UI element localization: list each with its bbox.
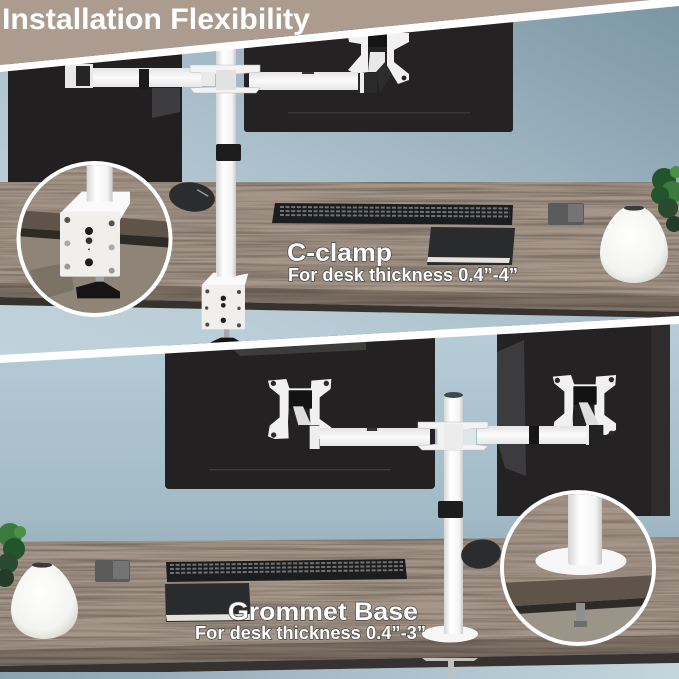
vase xyxy=(11,562,78,639)
mouse xyxy=(167,179,217,215)
under-desk plate and bolt xyxy=(422,658,478,676)
monitor right xyxy=(244,10,513,132)
left arm xyxy=(320,428,430,446)
clamp xyxy=(202,257,248,343)
monitor back right xyxy=(497,316,670,516)
title banner xyxy=(0,0,679,72)
right VESA bracket xyxy=(348,33,409,93)
label: Grommet Base xyxy=(195,598,426,643)
monitor left xyxy=(8,50,182,187)
desk thickness note: For desk thickness 0.4”-4” xyxy=(288,265,518,285)
title: Installation Flexibility xyxy=(2,3,310,36)
notebook xyxy=(427,227,515,265)
vase xyxy=(600,205,668,283)
right VESA bracket xyxy=(553,375,616,446)
label: C-clamp xyxy=(287,239,518,285)
right arm xyxy=(249,72,360,90)
desk xyxy=(0,537,679,667)
mount: grommet pole and arms xyxy=(268,375,616,676)
clip xyxy=(438,501,463,518)
plant xyxy=(0,523,26,587)
pole xyxy=(444,393,463,629)
notebook xyxy=(165,583,251,622)
left bracket xyxy=(65,64,93,88)
phone xyxy=(548,203,584,225)
mouse xyxy=(459,537,503,571)
divider strip xyxy=(0,316,679,363)
keyboard xyxy=(166,559,407,582)
desk underside xyxy=(0,653,679,672)
label: Grommet Base: Grommet Base xyxy=(228,598,418,626)
plant xyxy=(651,166,679,232)
hub xyxy=(190,65,260,93)
desk surface xyxy=(0,182,679,317)
clip xyxy=(216,144,241,161)
inset: C-clamp detail xyxy=(16,157,176,320)
desk thickness note: For desk thickness 0.4”-3” xyxy=(195,623,426,643)
panel: grommet scene xyxy=(0,316,679,679)
phone xyxy=(95,560,130,582)
mount: C-clamp pole and arms xyxy=(65,33,409,343)
monitor back left xyxy=(165,320,435,489)
desk underside xyxy=(0,297,679,318)
pole xyxy=(216,40,236,280)
panel: C-clamp scene xyxy=(0,0,679,360)
inset: grommet detail xyxy=(500,490,660,650)
right arm xyxy=(477,426,586,444)
left VESA bracket xyxy=(268,379,331,449)
keyboard xyxy=(272,203,513,225)
base xyxy=(422,626,478,642)
hub xyxy=(418,422,488,450)
left arm xyxy=(78,68,202,87)
label: C-clamp: C-clamp xyxy=(287,239,392,267)
